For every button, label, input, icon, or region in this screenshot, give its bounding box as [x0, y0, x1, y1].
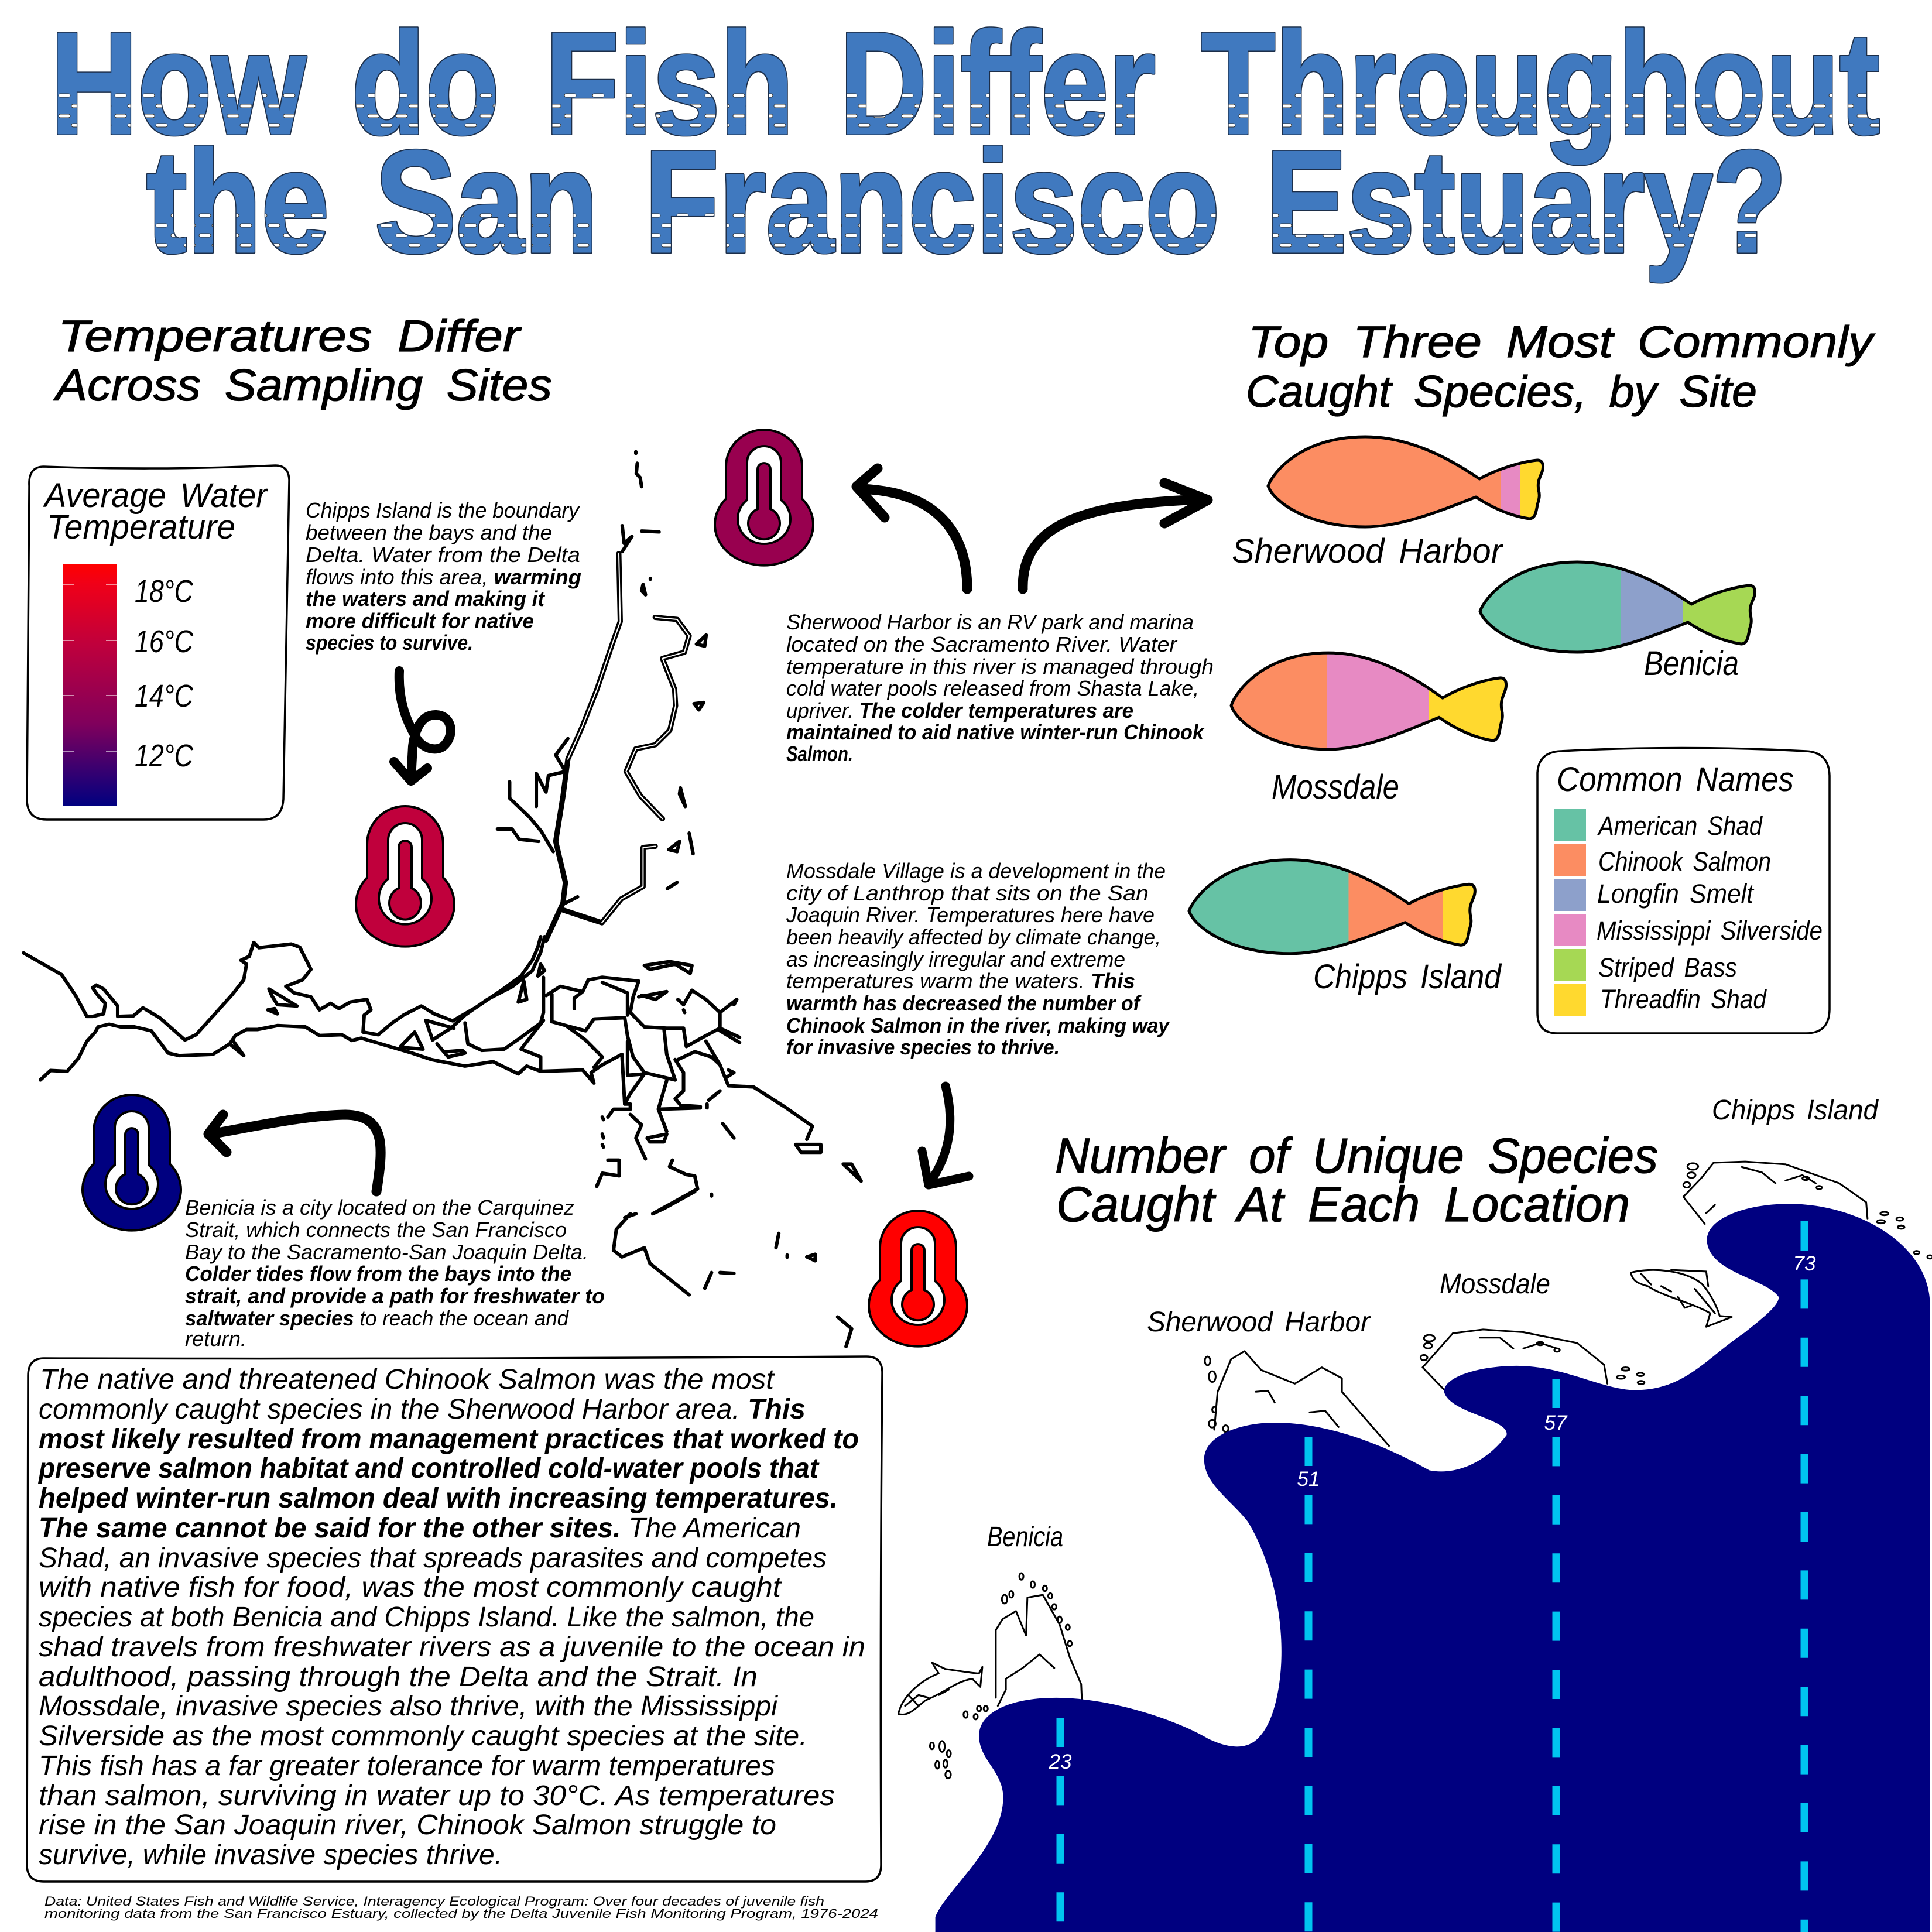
text box: main narrative: than salmon, surviving in water up to 30°C. As temperatures — [39, 1780, 835, 1811]
coast: Mossdale — [1420, 1330, 1645, 1392]
legend: common names — [1537, 748, 1830, 1033]
title — [50, 2, 1880, 283]
text box: main narrative: preserve salmon habitat and controlled cold-water pools that — [37, 1453, 820, 1484]
text: Sherwood Harbor — [786, 610, 1214, 766]
legend: average water temperature: Temperature — [47, 508, 235, 546]
text box: main narrative: helped winter-run salmon deal with increasing temperatures. — [39, 1483, 838, 1514]
fish chart: Mossdale — [1229, 651, 1508, 751]
wave area chart: number of unique species — [936, 1204, 1930, 1932]
value labels: 23 — [1049, 1751, 1072, 1773]
location labels: Benicia — [987, 1522, 1063, 1553]
text: Chipps Island: Delta. Water from the Delta — [306, 543, 580, 567]
text: Mossdale: Joaquin River. Temperatures here have — [786, 903, 1155, 927]
text: Mossdale: city of Lanthrop that sits on the San — [786, 881, 1149, 905]
text box: main narrative: The native and threatened Chinook Salmon was the most — [40, 1364, 775, 1395]
text: Sherwood Harbor: maintained to aid native winter-run Chinook — [786, 720, 1205, 744]
heading: top three species: Top Three Most Commonly — [1248, 317, 1875, 367]
text: Benicia: Strait, which connects the San Francisco — [185, 1218, 567, 1242]
text: Mossdale: Mossdale Village is a development in the — [786, 859, 1166, 883]
legend: common names: Chinook Salmon — [1598, 847, 1771, 876]
arrow: Chipps text to thermometer — [394, 671, 451, 781]
text: Mossdale: temperatures warm the waters. This — [786, 969, 1135, 993]
icon: salmon left — [898, 1663, 982, 1715]
legend: average water temperature — [27, 465, 289, 820]
text: Sherwood Harbor: located on the Sacramento River. Water — [786, 632, 1178, 656]
text: Sherwood Harbor: cold water pools released from Shasta Lake, — [786, 676, 1199, 700]
text box: main narrative: with native fish for food, was the most commonly caught — [39, 1572, 782, 1603]
text box: main narrative: adulthood, passing through the Delta and the Strait. In — [39, 1662, 758, 1693]
legend: common names: Threadfin Shad — [1600, 984, 1767, 1014]
text: Chipps Island: between the bays and the — [306, 520, 552, 544]
value labels: 73 — [1793, 1252, 1816, 1275]
text: Sherwood Harbor: Sherwood Harbor is an RV park and marina — [786, 610, 1194, 634]
fish chart: Sherwood Harbor — [1267, 436, 1544, 528]
text box: main narrative: The same cannot be said for the other sites. The American — [39, 1513, 801, 1544]
heading: top three species: Caught Species, by Site — [1246, 367, 1757, 417]
text: Mossdale: Chinook Salmon in the river, making way — [786, 1013, 1170, 1037]
value labels: 57 — [1544, 1412, 1568, 1434]
data source: Data: United States Fish and Wildlife Service, Interagency Ecological Program: Over four decades of juvenile fish — [44, 1894, 824, 1909]
text box: main narrative: This fish has a far greater tolerance for warm temperatures — [39, 1751, 775, 1782]
text: Benicia: Bay to the Sacramento-San Joaquin Delta. — [185, 1240, 588, 1264]
text box: main narrative — [27, 1356, 882, 1882]
text box: main narrative: Shad, an invasive species that spreads parasites and competes — [39, 1543, 827, 1574]
location labels — [987, 1095, 1879, 1553]
text box: main narrative: most likely resulted from management practices that worked to — [39, 1424, 859, 1455]
fish labels — [1232, 532, 1739, 996]
location labels: Sherwood Harbor — [1147, 1307, 1371, 1338]
fish labels: Benicia — [1644, 645, 1739, 683]
legend: average water temperature: 18°C — [135, 574, 194, 609]
icon: salmon right — [1631, 1270, 1732, 1327]
heading: temperatures differ: Temperatures Differ — [58, 311, 522, 361]
icon: thermometer Sherwood Harbor — [715, 430, 813, 566]
text: Chipps Island: flows into this area, warming — [306, 565, 581, 589]
legend: average water temperature: 14°C — [135, 679, 194, 714]
fish labels: Chipps Island — [1313, 958, 1502, 996]
text box: main narrative: survive, while invasive species thrive. — [39, 1839, 502, 1871]
text: Chipps Island: Chipps Island is the boundary — [306, 498, 580, 522]
text: Chipps Island: the waters and making it — [306, 587, 546, 611]
text: Mossdale: for invasive species to thrive. — [786, 1035, 1060, 1059]
text: Sherwood Harbor: temperature in this river is managed through — [786, 655, 1214, 679]
heading: number of unique species: Number of Unique Species — [1055, 1128, 1658, 1183]
text box: main narrative: rise in the San Joaquin river, Chinook Salmon struggle to — [39, 1810, 776, 1841]
value labels: 51 — [1297, 1468, 1320, 1491]
arrow: Sherwood text to thermometer — [857, 468, 967, 589]
text: Chipps Island: species to survive. — [306, 631, 473, 655]
legend: common names: American Shad — [1597, 811, 1763, 841]
icon: thermometer Benicia — [83, 1095, 181, 1231]
legend: common names: Mississippi Silverside — [1597, 916, 1823, 946]
arrow: Mossdale text to thermometer — [922, 1086, 969, 1185]
arrow: Benicia text to thermometer — [208, 1115, 381, 1191]
heading: temperatures differ: Across Sampling Sites — [53, 361, 552, 410]
icon: thermometer Mossdale — [869, 1211, 967, 1347]
text: Mossdale: warmth has decreased the number of — [786, 991, 1142, 1015]
map of the San Francisco Estuary — [23, 452, 861, 1347]
text: Benicia: Colder tides flow from the bays into the — [185, 1262, 571, 1286]
fish labels: Sherwood Harbor — [1232, 532, 1504, 570]
location labels: Chipps Island — [1712, 1095, 1879, 1126]
heading: top three species — [1246, 317, 1875, 417]
text: Benicia: saltwater species to reach the ocean and — [185, 1306, 569, 1330]
coast: Chipps Island — [1683, 1162, 1932, 1259]
text: Mossdale — [786, 859, 1170, 1059]
coast sketches and fish illustrations — [898, 1162, 1932, 1779]
text: Mossdale: as increasingly irregular and extreme — [786, 947, 1125, 971]
fish chart: Chipps Island — [1187, 858, 1477, 955]
text: Sherwood Harbor: Salmon. — [786, 742, 853, 766]
text: Mossdale: been heavily affected by climate change, — [786, 925, 1161, 949]
fish chart: Benicia — [1479, 561, 1756, 653]
value labels — [1049, 1252, 1816, 1773]
legend: average water temperature: 16°C — [135, 624, 194, 659]
text box: main narrative: Mossdale, invasive species also thrive, with the Mississippi — [39, 1691, 778, 1722]
text box: main narrative: Silverside as the most commonly caught species at the site. — [39, 1721, 807, 1752]
icon: thermometer Chipps Island — [356, 806, 454, 947]
heading: number of unique species: Caught At Each Location — [1056, 1177, 1630, 1232]
text: Sherwood Harbor: upriver. The colder temperatures are — [786, 698, 1133, 722]
text box: main narrative: shad travels from freshwater rivers as a juvenile to the ocean in — [39, 1632, 865, 1663]
data source: monitoring data from the San Francisco Estuary, collected by the Delta Juvenile Fish Monitoring Program, 1976-2024 — [44, 1906, 878, 1921]
legend: average water temperature: 12°C — [135, 738, 194, 773]
fish labels: Mossdale — [1272, 768, 1399, 806]
text: Benicia — [185, 1195, 605, 1351]
heading: number of unique species — [1055, 1128, 1658, 1232]
coast: Sherwood Harbor — [1205, 1351, 1389, 1446]
coast: Benicia — [930, 1573, 1082, 1779]
data source — [44, 1894, 878, 1921]
text box: main narrative: species at both Benicia and Chipps Island. Like the salmon, the — [39, 1602, 814, 1633]
dashes: site depth lines — [1060, 1221, 1804, 1932]
arrow: Sherwood text to fish — [1023, 483, 1208, 589]
legend: average water temperature: Average Water — [43, 477, 269, 515]
location labels: Mossdale — [1440, 1269, 1550, 1300]
legend: common names: Striped Bass — [1598, 953, 1737, 982]
text: Chipps Island: more difficult for native — [306, 609, 534, 633]
text: Benicia: Benicia is a city located on the Carquinez — [185, 1195, 574, 1220]
legend: common names: Common Names — [1557, 761, 1794, 799]
text: Chipps Island — [306, 498, 581, 655]
heading: temperatures differ — [53, 311, 552, 410]
text: Benicia: strait, and provide a path for freshwater to — [185, 1284, 605, 1308]
text: Benicia: return. — [185, 1327, 246, 1351]
legend: common names: Longfin Smelt — [1597, 879, 1755, 909]
text box: main narrative: commonly caught species in the Sherwood Harbor area. This — [39, 1394, 806, 1425]
